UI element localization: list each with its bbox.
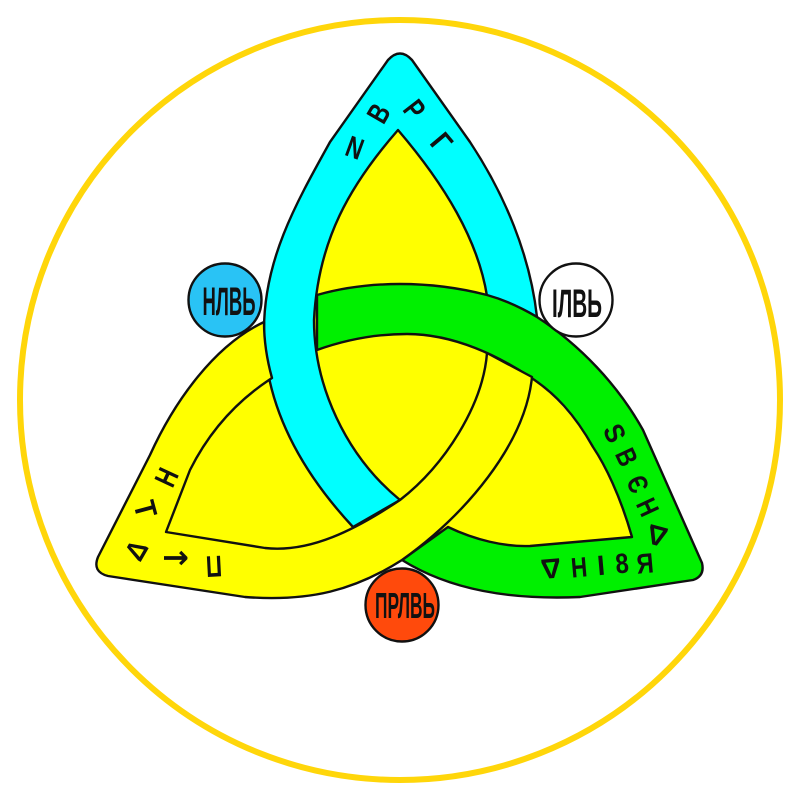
runes: left band: Δ [118, 535, 155, 566]
green band: Svenadvija [317, 284, 703, 598]
runes: top band: Г [423, 126, 459, 160]
runes: left band [118, 463, 223, 584]
label circle: Prav [366, 568, 438, 642]
yellow inner lobes [166, 130, 632, 560]
label circle: Nav [188, 264, 262, 336]
runes: right band [597, 419, 671, 553]
label circle: Yav [540, 264, 612, 336]
runes: bottom-right band [540, 546, 655, 585]
runes: right band: Δ [643, 518, 671, 553]
label circle: Prav: ПРЛВЬ [375, 585, 435, 626]
runes: right band: S [597, 419, 632, 448]
runes: right band: Є [620, 471, 654, 498]
label circle: Yav: IЛВЬ [552, 282, 602, 326]
yellow band: Ruy Nav [96, 322, 532, 598]
runes: bottom-right band: Δ [540, 552, 562, 585]
runes: left band: Т [126, 497, 163, 522]
label circle: Nav: НЛВЬ [202, 280, 256, 324]
runes: bottom-right band: Н [570, 552, 589, 584]
runes: top band: N [341, 129, 368, 166]
runes: top band: В [360, 98, 397, 129]
blue band: Svarg [264, 54, 537, 527]
runes: right band: В [609, 444, 643, 471]
runes: top band [341, 93, 459, 166]
runes: left band: Н [148, 463, 186, 492]
runes: bottom-right band: 8 [614, 547, 630, 580]
runes: left band: ↑ [156, 545, 194, 571]
runes: left band: П [205, 549, 223, 584]
triquetra knot [96, 54, 703, 598]
runes: bottom-right band: Я [635, 546, 655, 580]
runes: bottom-right band: I [596, 550, 606, 581]
runes: right band: Н [630, 494, 664, 521]
runes: top band: Р [396, 93, 432, 126]
